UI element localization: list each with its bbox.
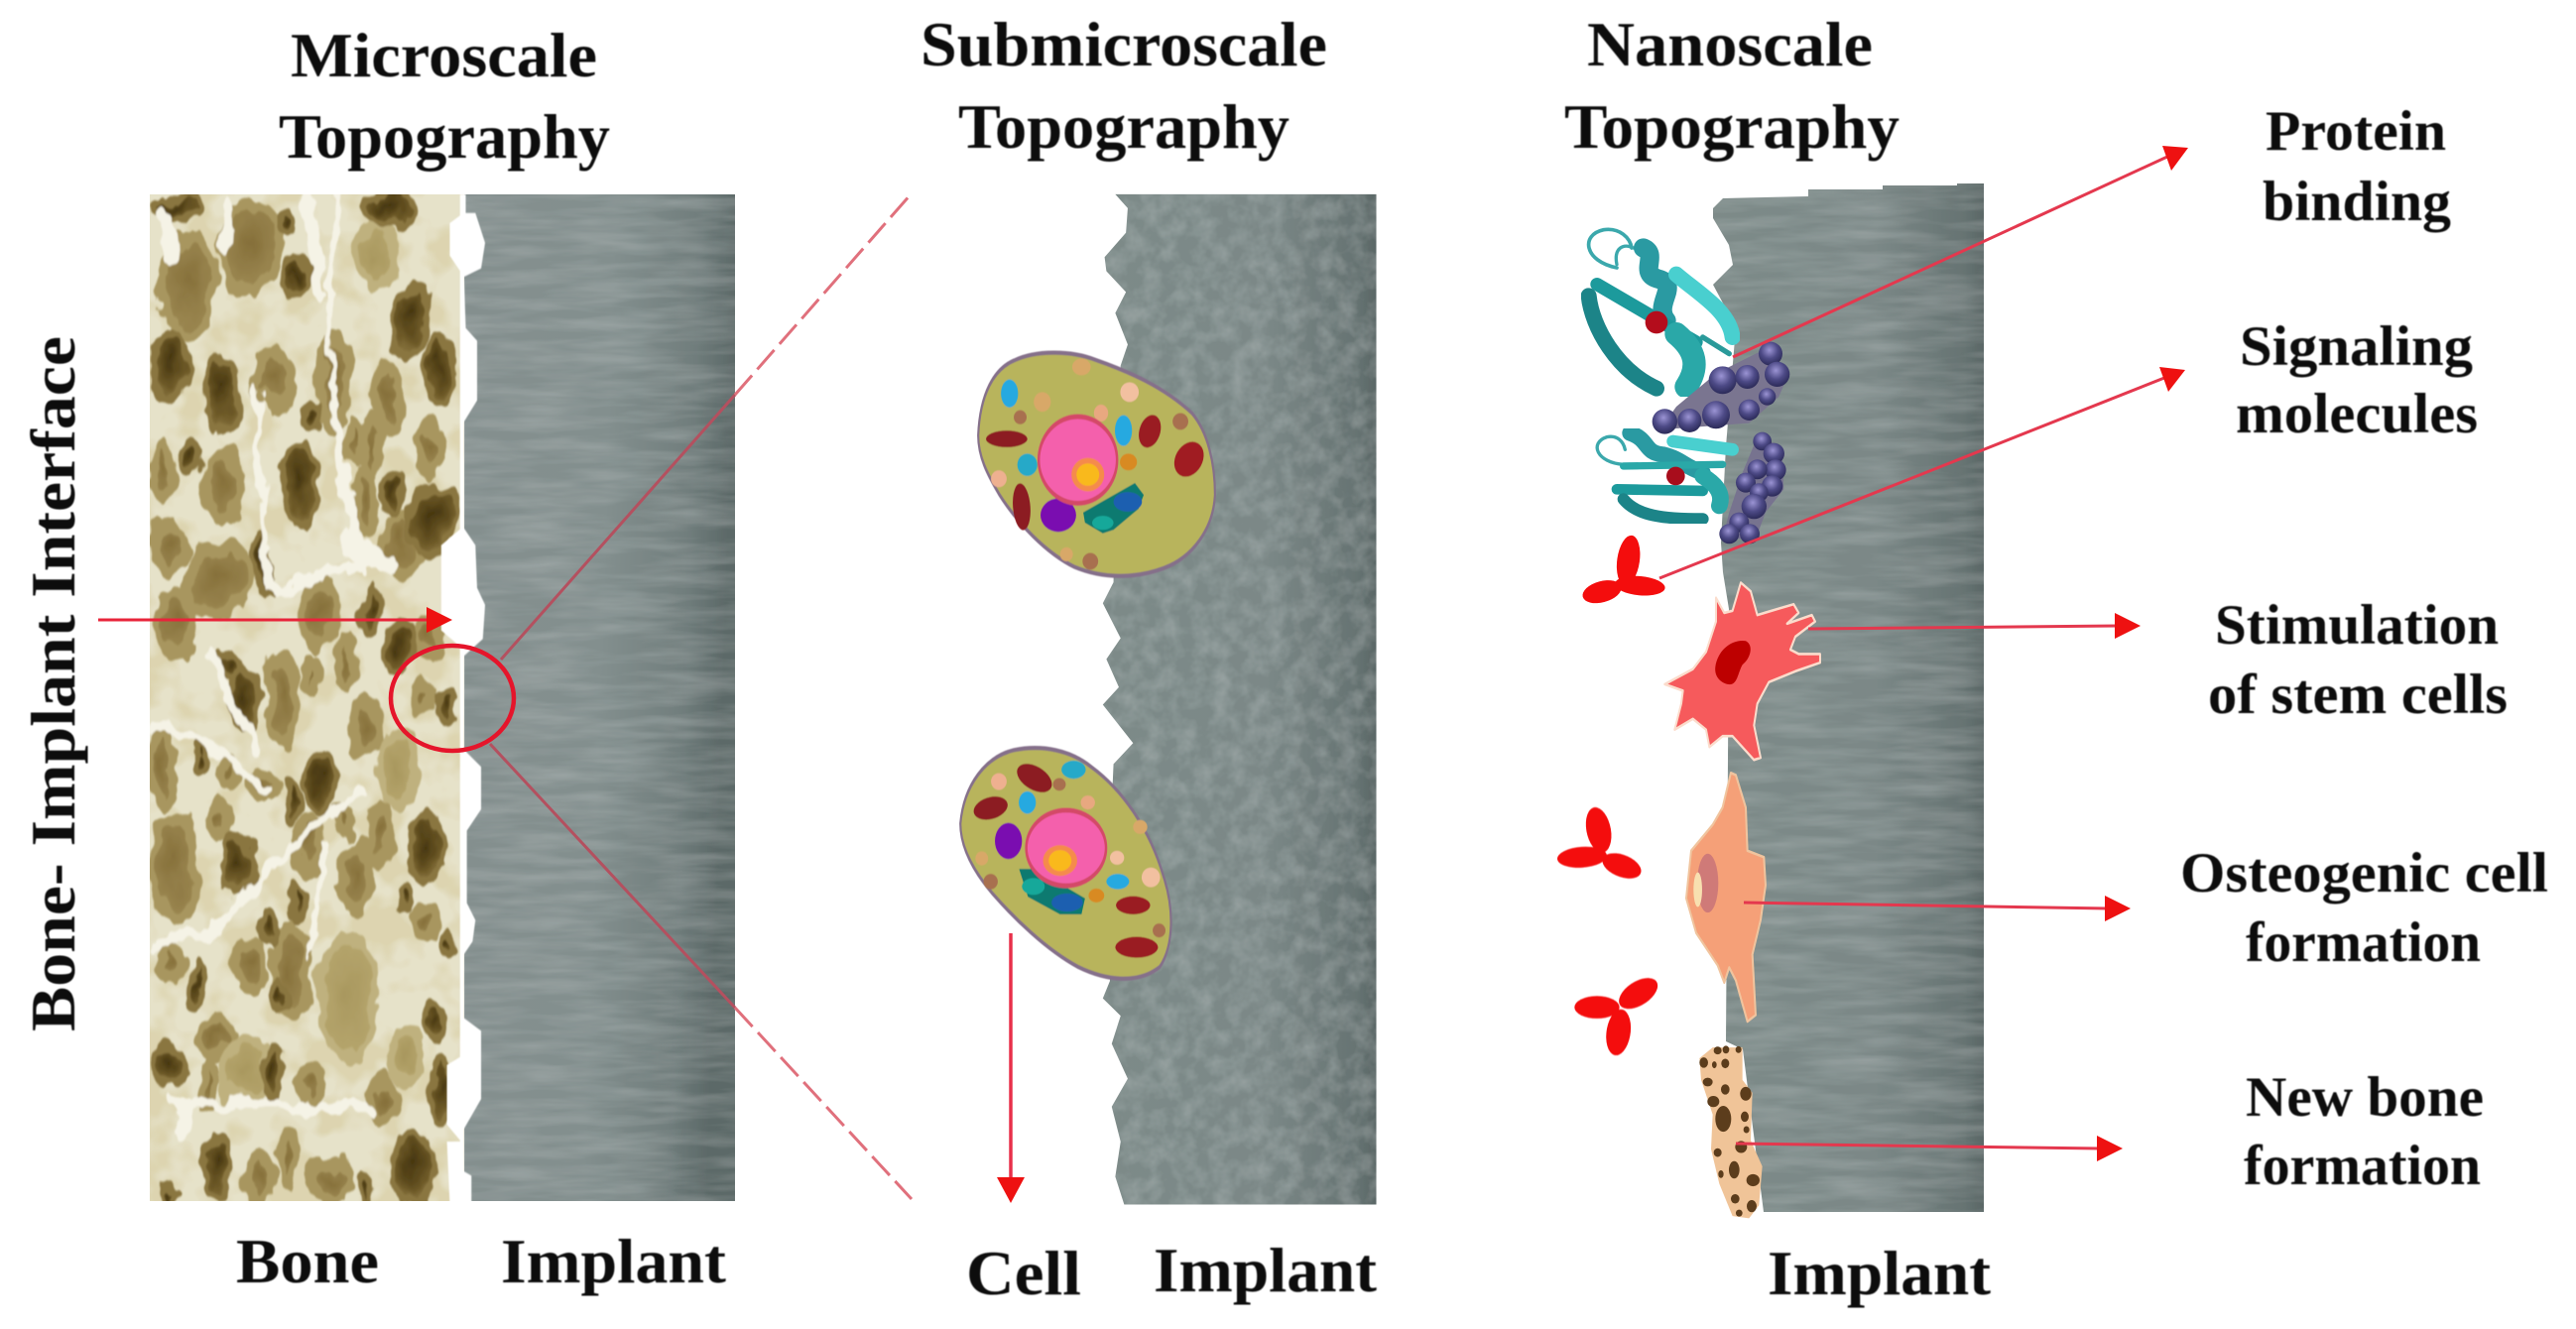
- text: signaling molecules: molecules: [2236, 383, 2478, 445]
- icon: osteogenic cell: [1686, 773, 1766, 1022]
- arrow: protein binding: [1733, 146, 2188, 357]
- arrow: signaling molecules: [1659, 367, 2185, 578]
- text: protein binding: [2263, 100, 2451, 233]
- icon: signaling molecule upper: [1580, 534, 1665, 607]
- text: protein binding: binding: [2263, 171, 2451, 233]
- text: signaling molecules: [2236, 315, 2478, 445]
- text: new bone formation: formation: [2244, 1135, 2481, 1197]
- text: stimulation of stem cells: Stimulation: [2215, 594, 2499, 657]
- heading: microscale topography: Topography: [279, 101, 610, 172]
- text: stimulation of stem cells: of stem cells: [2208, 664, 2508, 726]
- organelles: lower cell: [973, 759, 1165, 958]
- implant block: [464, 194, 735, 1201]
- cell: upper: [978, 353, 1215, 576]
- heading: nanoscale topography: Nanoscale: [1587, 9, 1873, 79]
- implant block: [1713, 183, 1984, 1212]
- bone texture: [150, 193, 467, 1204]
- text: osteogenic cell formation: [2180, 842, 2548, 974]
- icon: signaling molecule middle: [1557, 802, 1643, 883]
- text: protein binding: Protein: [2266, 100, 2446, 163]
- panel: nanoscale topography: [1557, 9, 2548, 1308]
- arrow: osteogenic cell formation: [1744, 896, 2131, 921]
- molecules: upper sphere cluster: [1653, 342, 1789, 434]
- icon: new bone fragment: [1699, 1045, 1763, 1218]
- text: osteogenic cell formation: formation: [2246, 911, 2481, 974]
- cell: lower: [960, 748, 1171, 979]
- heading: submicroscale topography: Submicroscale: [920, 9, 1327, 79]
- panel: microscale topography: [18, 20, 735, 1296]
- panel: submicroscale topography: [920, 9, 1378, 1308]
- label: implant: Implant: [501, 1226, 727, 1296]
- text: stimulation of stem cells: [2208, 594, 2508, 726]
- arrow: interface pointer: [98, 607, 452, 633]
- arrow: cell pointer: [997, 933, 1025, 1203]
- heading: nanoscale topography: Topography: [1564, 91, 1900, 162]
- interface white gaps: [441, 194, 485, 1204]
- icon: signaling molecule lower: [1574, 972, 1660, 1059]
- heading: submicroscale topography: Topography: [958, 91, 1289, 162]
- nucleus: upper cell: [1039, 417, 1117, 503]
- nucleus: lower cell: [1027, 810, 1106, 886]
- vertical label: bone-implant interface: Bone- Implant Interface: [18, 336, 88, 1031]
- text: osteogenic cell formation: Osteogenic cell: [2180, 842, 2548, 905]
- protein: lower ribbon: [1597, 433, 1733, 519]
- arrow: stimulation of stem cells: [1808, 613, 2141, 639]
- organelles: upper cell: [986, 359, 1205, 569]
- protein: upper ribbon: [1589, 229, 1733, 389]
- heading: submicroscale topography: [920, 9, 1327, 162]
- label: cell: Cell: [966, 1238, 1081, 1308]
- implant with jagged surface: [1103, 194, 1377, 1205]
- icon: stem cell: [1664, 582, 1820, 760]
- text: new bone formation: New bone: [2246, 1066, 2484, 1129]
- label: bone: Bone: [236, 1226, 379, 1296]
- heading: nanoscale topography: [1564, 9, 1900, 162]
- zoom lines: connectors: [490, 193, 912, 1199]
- label: implant: Implant: [1768, 1238, 1992, 1308]
- circle: zoom region: [391, 646, 514, 751]
- heading: microscale topography: Microscale: [291, 20, 597, 90]
- text: new bone formation: [2244, 1066, 2484, 1197]
- label: implant: Implant: [1154, 1235, 1378, 1305]
- arrow: new bone formation: [1736, 1136, 2123, 1161]
- text: signaling molecules: Signaling: [2240, 315, 2473, 378]
- heading: microscale topography: [279, 20, 610, 172]
- molecules: lower sphere cluster: [1719, 432, 1786, 544]
